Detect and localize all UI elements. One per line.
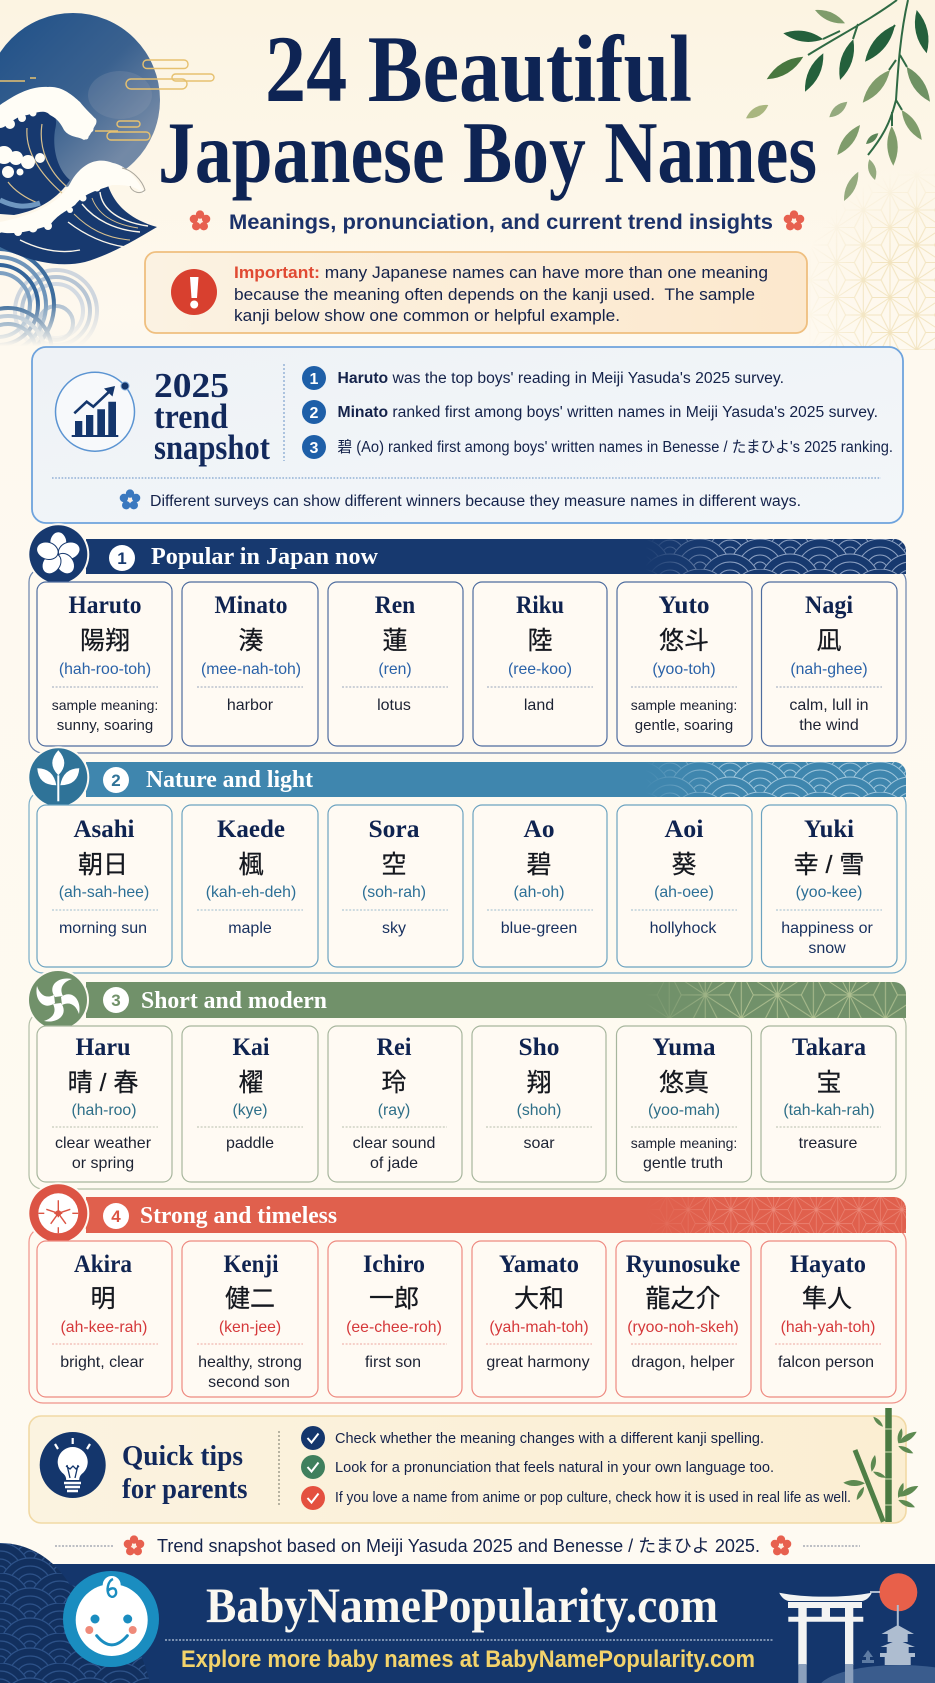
heading: quick tips for parents [122, 1440, 248, 1505]
card: Akira: Akira [74, 1251, 132, 1278]
card: Aoi: 葵 [671, 851, 697, 879]
card: Sho: soar [523, 1135, 555, 1152]
card: Akira [37, 1241, 172, 1397]
card: Nagi: the wind [799, 717, 859, 734]
card: Kaede: 楓 [238, 851, 264, 879]
trend item 1: 1 [310, 371, 319, 388]
heading: 2025 trend snapshot [154, 366, 270, 467]
card: Kai: Kai [232, 1034, 270, 1061]
card: Nagi [762, 582, 897, 746]
card: Ao [473, 805, 607, 967]
section header 2: Nature and light [146, 767, 313, 793]
text: important note: kanji below show one common or helpful example. [234, 307, 620, 325]
card: Ryunosuke: Ryunosuke [626, 1251, 740, 1278]
card: Ao: blue-green [501, 920, 577, 937]
card: Ichiro [328, 1241, 462, 1397]
card: Asahi: 朝日 [78, 851, 128, 879]
card: Ren: 蓮 [382, 627, 408, 655]
footer banner [0, 1543, 935, 1683]
card: Haru [37, 1026, 172, 1182]
card: Kenji: (ken-jee) [219, 1319, 281, 1336]
illustration: hanging leaves [746, 0, 930, 201]
card: Yuto: sample meaning: [631, 697, 737, 713]
card: Kenji: Kenji [224, 1251, 279, 1278]
card: Minato: Minato [214, 592, 288, 619]
card: Haru: (hah-roo) [72, 1102, 136, 1119]
card: Nagi: Nagi [805, 592, 853, 619]
card: Riku: Riku [516, 592, 564, 619]
card: Ryunosuke: (ryoo-noh-skeh) [627, 1319, 739, 1336]
card: Haru: Haru [76, 1034, 131, 1061]
panel: section 3 short and modern [27, 969, 906, 1189]
card: Yuma: (yoo-mah) [648, 1102, 720, 1119]
card: Sora: 空 [381, 851, 407, 879]
card: Kenji [182, 1241, 318, 1397]
card: Haruto: Haruto [68, 592, 142, 619]
section header 4: Strong and timeless [140, 1203, 337, 1229]
heading: quick tips for parents: for parents [122, 1473, 248, 1505]
card: Kaede: maple [228, 920, 272, 937]
card: Yuki: 幸 / 雪 [794, 851, 864, 879]
card: Asahi: Asahi [74, 816, 135, 843]
card: Yuki: Yuki [804, 816, 854, 843]
card: Takara: 宝 [816, 1069, 842, 1097]
card: Nagi: (nah-ghee) [790, 661, 868, 678]
panel: section 4 strong and timeless [27, 1182, 906, 1403]
trend item 3 [302, 435, 893, 459]
card: Ichiro: first son [365, 1354, 421, 1371]
card: Akira: 明 [90, 1285, 116, 1313]
card: Asahi [37, 805, 172, 967]
card: Hayato: falcon person [778, 1354, 874, 1371]
card: Kenji: second son [208, 1374, 290, 1391]
card: Yamato: 大和 [514, 1285, 564, 1313]
card: Aoi: Aoi [664, 816, 704, 843]
tip 2: Look for a pronunciation that feels natural in your own language too. [335, 1459, 774, 1476]
card: Haruto: sample meaning: [52, 697, 158, 713]
card: Rei: 玲 [381, 1069, 407, 1097]
title: Japanese Boy Names [158, 105, 817, 202]
card: Kai: paddle [226, 1135, 274, 1152]
text: important note: Important: many Japanese names can have more than one meaning [234, 264, 768, 282]
trend item 1: Haruto was the top boys' reading in Meiji Yasuda's 2025 survey. [338, 370, 784, 387]
card: Rei: of jade [370, 1155, 418, 1172]
section header 1: 1 [117, 549, 127, 568]
section header 3: 3 [111, 991, 121, 1010]
card: Yamato [472, 1241, 606, 1397]
card: Ryunosuke: 龍之介 [645, 1285, 721, 1313]
card: Takara: (tah-kah-rah) [783, 1102, 875, 1119]
card: Sora [328, 805, 463, 967]
card: Sora: sky [382, 920, 406, 937]
card: Riku [473, 582, 607, 746]
card: Riku: land [524, 697, 554, 714]
card: Akira: bright, clear [60, 1354, 144, 1371]
card: Sho: (shoh) [517, 1102, 561, 1119]
card: Ichiro: 一郎 [369, 1285, 419, 1313]
card: Aoi: (ah-oee) [654, 884, 714, 901]
title [158, 16, 817, 202]
card: Hayato: Hayato [790, 1251, 866, 1278]
note: different surveys: Different surveys can show different winners because they measure names in different ways. [150, 493, 801, 510]
card: Takara: Takara [792, 1034, 866, 1061]
card: Sho [472, 1026, 606, 1182]
card: Yuto: Yuto [658, 592, 710, 619]
icon: light bulb [40, 1432, 106, 1498]
card: Ao: (ah-oh) [514, 884, 564, 901]
trend item 2: 2 [310, 405, 319, 422]
card: Minato: 湊 [238, 627, 264, 655]
card: Haru: or spring [72, 1155, 134, 1172]
illustration: great wave and moon [0, 13, 160, 344]
card: Yuki: (yoo-kee) [796, 884, 862, 901]
card: Yuto: 悠斗 [659, 627, 709, 655]
card: Haruto: (hah-roo-toh) [59, 661, 151, 678]
section header 1: Popular in Japan now [151, 544, 379, 570]
card: Minato: harbor [227, 697, 274, 714]
section header 2: 2 [111, 771, 121, 790]
card: Yuki: happiness or [781, 920, 873, 937]
card: Yamato: great harmony [486, 1354, 590, 1371]
card: Ichiro: (ee-chee-roh) [346, 1319, 442, 1336]
card: Rei [328, 1026, 462, 1182]
card: Sho: Sho [518, 1034, 560, 1061]
card: Sho: 翔 [526, 1069, 552, 1097]
card: Minato [182, 582, 318, 746]
footnote: trend sources: Trend snapshot based on Meiji Yasuda 2025 and Benesse / たまひよ 2025. [157, 1536, 760, 1556]
card: Rei: Rei [376, 1034, 412, 1061]
card: Takara [761, 1026, 896, 1182]
card: Rei: clear sound [353, 1135, 435, 1152]
icon: gold clouds [0, 60, 214, 140]
card: Yuto: (yoo-toh) [652, 661, 716, 678]
trend item 2 [302, 400, 878, 424]
card: Ren: lotus [377, 697, 411, 714]
card: Ren [328, 582, 463, 746]
card: Haruto [37, 582, 172, 746]
card: Ryunosuke: dragon, helper [631, 1354, 735, 1371]
card: Yuto: gentle, soaring [635, 717, 733, 734]
heading: quick tips for parents: Quick tips [122, 1440, 243, 1472]
card: Yuki [762, 805, 897, 967]
card: Yuma: sample meaning: [631, 1135, 737, 1151]
card: Yuto [617, 582, 752, 746]
card: Aoi [617, 805, 752, 967]
brand name: BabyNamePopularity.com [206, 1577, 718, 1633]
illustration: bamboo [843, 1408, 918, 1522]
card: Haruto: sunny, soaring [57, 717, 153, 734]
card: Kaede: (kah-eh-deh) [206, 884, 296, 901]
icon: baby face logo [63, 1571, 159, 1667]
card: Yuma: gentle truth [643, 1155, 723, 1172]
card: Ao: 碧 [526, 851, 552, 879]
card: Kenji: 健二 [225, 1285, 275, 1313]
card: Haru: clear weather [55, 1135, 152, 1152]
card: Sora: (soh-rah) [362, 884, 426, 901]
card: Kaede: Kaede [217, 816, 285, 843]
section header 1 [27, 523, 906, 585]
panel: section 1 popular in Japan now [27, 523, 906, 753]
card: Yuki: snow [808, 940, 846, 957]
card: Ichiro: Ichiro [363, 1251, 425, 1278]
card: Rei: (ray) [378, 1102, 410, 1119]
trend item 1 [302, 366, 784, 390]
heading: 2025 trend snapshot: 2025 [154, 366, 229, 405]
tip 3 [301, 1486, 851, 1510]
heading: 2025 trend snapshot: snapshot [154, 428, 270, 467]
section header 3: Short and modern [141, 988, 327, 1014]
card: Hayato: 隼人 [802, 1285, 852, 1313]
card: Kai: (kye) [232, 1102, 268, 1119]
card: Kenji: healthy, strong [198, 1354, 302, 1371]
card: Kaede [182, 805, 318, 967]
card: Akira: (ah-kee-rah) [61, 1319, 147, 1336]
subtitle: Meanings, pronunciation, and current trend insights [229, 211, 773, 234]
tip 2 [301, 1455, 774, 1479]
card: Ao: Ao [524, 816, 554, 843]
card: Minato: (mee-nah-toh) [201, 661, 301, 678]
card: Riku: (ree-koo) [508, 661, 572, 678]
card: Asahi: morning sun [59, 920, 147, 937]
card: Takara: treasure [799, 1135, 857, 1152]
card: Yamato: (yah-mah-toh) [489, 1319, 589, 1336]
card: Yuma [616, 1026, 752, 1182]
card: Sora: Sora [368, 816, 420, 843]
section header 4: 4 [111, 1207, 121, 1226]
card: Asahi: (ah-sah-hee) [59, 884, 149, 901]
section header 4 [27, 1182, 906, 1244]
card: Riku: 陸 [527, 627, 553, 655]
text: important note: because the meaning often depends on the kanji used. The sample [234, 286, 755, 304]
trend item 2: Minato ranked first among boys' written names in Meiji Yasuda's 2025 survey. [338, 404, 878, 421]
card: Ren: Ren [375, 592, 415, 619]
trend item 3: 碧 (Ao) ranked first among boys' written names in Benesse / たまひよ's 2025 ranking. [338, 438, 893, 456]
tip 3: If you love a name from anime or pop culture, check how it is used in real life as well. [335, 1489, 851, 1506]
card: Haru: 晴 / 春 [68, 1069, 138, 1097]
icon: growth chart [56, 372, 134, 451]
panel: 2025 trend snapshot [32, 347, 903, 523]
callout: important note [145, 252, 807, 333]
card: Yuma: Yuma [652, 1034, 716, 1061]
section header 3 [27, 969, 906, 1031]
card: Kai: 櫂 [238, 1069, 264, 1097]
section header 2 [27, 746, 906, 808]
icon: exclamation [171, 269, 217, 315]
heading: 2025 trend snapshot: trend [154, 397, 228, 436]
card: Hayato [761, 1241, 896, 1397]
text: important note [234, 264, 768, 325]
card: Yamato: Yamato [499, 1251, 579, 1278]
call to action: Explore more baby names at BabyNamePopularity.com [181, 1646, 755, 1673]
card: Ryunosuke [616, 1241, 751, 1397]
card: Ren: (ren) [378, 661, 412, 678]
tip 1: Check whether the meaning changes with a different kanji spelling. [335, 1430, 764, 1447]
card: Yuma: 悠真 [659, 1069, 709, 1097]
card: Hayato: (hah-yah-toh) [781, 1319, 875, 1336]
tip 1 [301, 1426, 764, 1450]
card: Nagi: 凪 [816, 627, 842, 655]
panel: quick tips for parents [29, 1416, 906, 1523]
card: Kai [182, 1026, 318, 1182]
trend item 3: 3 [310, 440, 319, 457]
title: 24 Beautiful [265, 16, 692, 122]
panel: section 2 nature and light [27, 746, 906, 973]
card: Haruto: 陽翔 [80, 627, 130, 655]
card: Aoi: hollyhock [650, 920, 717, 937]
decoration: asanoha pattern [812, 179, 935, 350]
card: Nagi: calm, lull in [789, 697, 869, 714]
illustration: torii, sun and pagoda [779, 1573, 935, 1683]
